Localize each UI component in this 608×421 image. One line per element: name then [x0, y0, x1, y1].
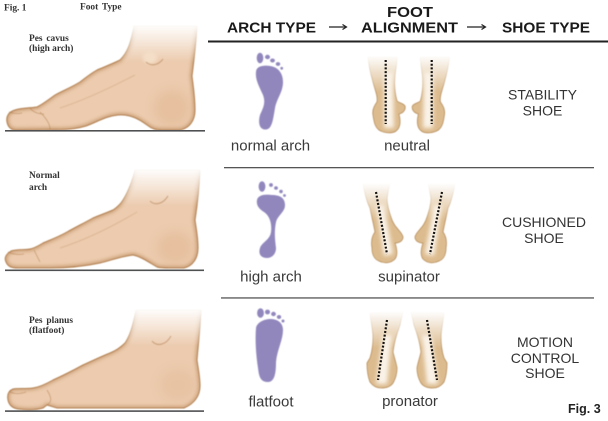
column heading: SHOE TYPE: SHOE TYPE: [502, 20, 590, 36]
label: Pes cavus (high arch): Pes cavus: [29, 34, 69, 44]
column heading: ARCH TYPE: ARCH TYPE: [227, 20, 316, 36]
label: high arch: high arch: [240, 268, 302, 286]
icon: normal arch footprint: [256, 53, 283, 130]
label: flatfoot: flatfoot: [248, 394, 294, 410]
panel: normal arch side-view foot: [5, 170, 204, 271]
arrow: arch type to foot alignment: [329, 24, 346, 30]
figure caption: Fig. 3: Fig. 3: [568, 402, 601, 416]
label: pronator: pronator: [382, 393, 438, 410]
label: supinator: supinator: [378, 268, 440, 286]
label: MOTION CONTROL SHOE: MOTION: [517, 334, 573, 350]
label: Normal arch: Normal: [29, 171, 60, 181]
panel: flatfoot side-view foot: [5, 310, 204, 412]
foot illustration: normal arch: [5, 170, 200, 268]
illustration: supinator heels: [363, 182, 455, 263]
ground line: [5, 270, 204, 271]
foot illustration: pes planus: [8, 310, 201, 410]
label: normal arch: normal arch: [231, 138, 310, 154]
figure caption: Fig. 1: Fig. 1: [4, 4, 27, 14]
illustration: pronator heels: [367, 312, 447, 388]
ground line: [5, 410, 204, 412]
label: STABILITY SHOE: SHOE: [523, 102, 562, 118]
row: high arch: [240, 181, 586, 286]
label: Normal arch: arch: [29, 183, 48, 193]
label: Pes planus (flatfoot): (flatfoot): [29, 325, 64, 336]
panel: high arch side-view foot: [5, 26, 205, 132]
label: CUSHIONED SHOE: CUSHIONED: [502, 214, 586, 230]
row: flatfoot: [248, 308, 579, 410]
label: MOTION CONTROL SHOE: CONTROL: [511, 350, 579, 366]
ground line: [5, 130, 205, 132]
arrow: foot alignment to shoe type: [467, 24, 486, 30]
label: CUSHIONED SHOE: SHOE: [524, 230, 564, 246]
label: Pes planus (flatfoot): Pes planus: [29, 316, 73, 326]
heading: Foot Type: Foot Type: [80, 2, 122, 12]
foot illustration: pes cavus: [7, 26, 197, 130]
label: MOTION CONTROL SHOE: SHOE: [525, 365, 565, 381]
column heading: FOOT ALIGNMENT: FOOT: [387, 4, 433, 21]
column heading: FOOT ALIGNMENT: ALIGNMENT: [361, 20, 458, 36]
row: normal arch: [231, 53, 578, 155]
illustration: neutral heels: [368, 57, 449, 133]
label: neutral: neutral: [384, 138, 430, 154]
label: Pes cavus (high arch): (high arch): [29, 43, 73, 54]
label: STABILITY SHOE: STABILITY: [508, 86, 578, 102]
icon: flatfoot footprint: [256, 308, 284, 382]
icon: high arch footprint: [257, 181, 286, 258]
